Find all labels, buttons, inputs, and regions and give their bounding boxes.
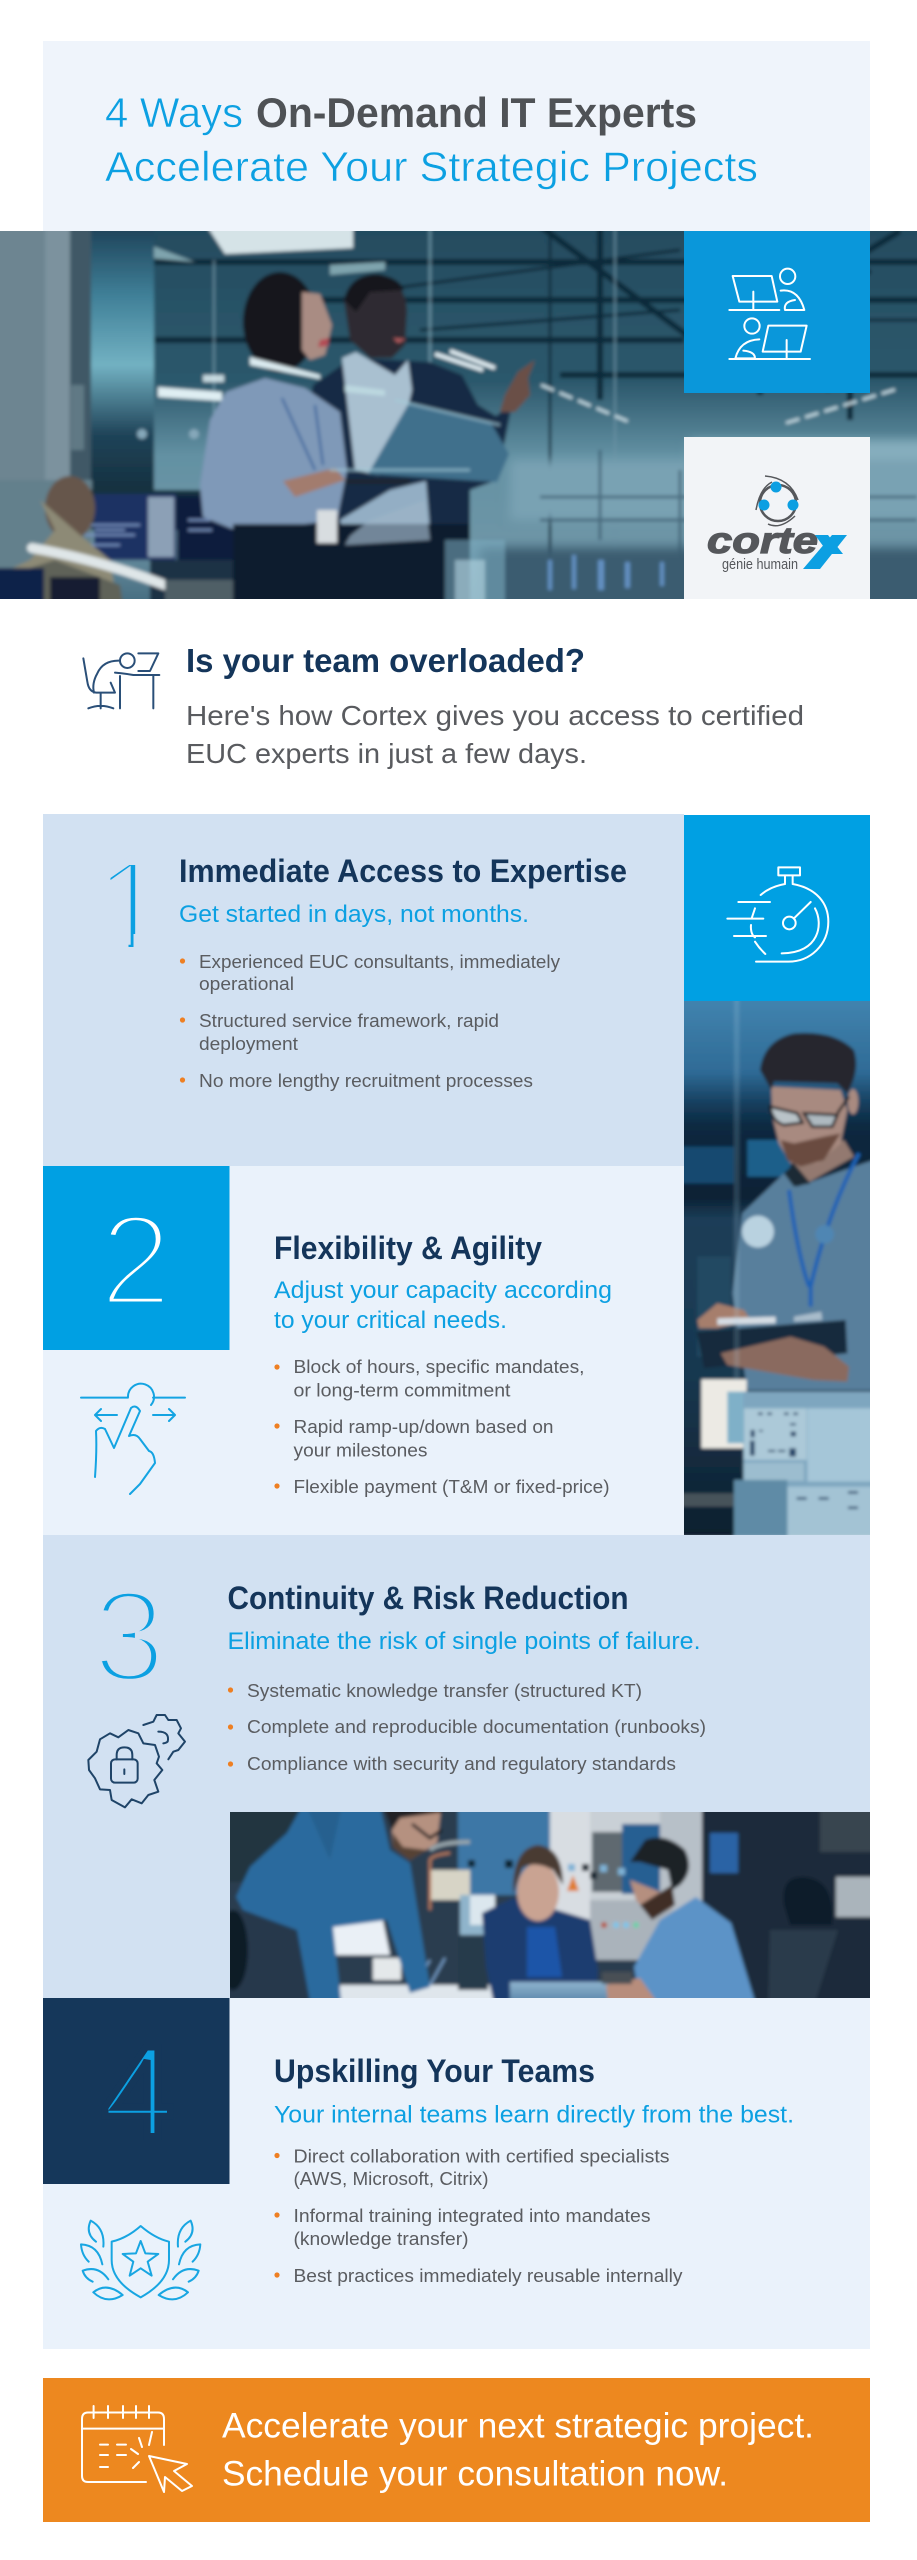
bullet list: Block of hours, specific mandates, (294, 1356, 584, 1377)
white monitor (330, 1917, 393, 1959)
icon: shield with laurels (81, 2221, 200, 2299)
heading: Upskilling Your Teams (274, 2053, 595, 2089)
photo: team around laptop (230, 1812, 870, 1998)
woman (243, 272, 317, 372)
bullet list: Rapid ramp-up/down based on (294, 1416, 554, 1437)
photo: man with tablet (684, 1001, 870, 1535)
panel: header (43, 41, 870, 231)
bullet list (180, 951, 561, 1091)
panel: step 1 (43, 814, 684, 1167)
bullet list: Best practices immediately reusable internally (294, 2265, 683, 2286)
bullet list: deployment (199, 1033, 299, 1054)
icon: two people at computers (729, 269, 810, 359)
bullet list: Flexible payment (T&M or fixed-price) (294, 1476, 610, 1497)
hero photo (0, 211, 917, 619)
panel: intro (83, 642, 804, 769)
icon: stopwatch (727, 867, 828, 962)
heading: Continuity & Risk Reduction (228, 1580, 628, 1616)
bullet list: (knowledge transfer) (294, 2228, 468, 2249)
bullet list: Complete and reproducible documentation (runbooks) (247, 1716, 706, 1737)
logo tagline: génie humain (722, 556, 798, 573)
icon: calendar with cursor (82, 2406, 192, 2492)
desk (336, 1981, 496, 1998)
laptop (506, 1978, 610, 1998)
subheading: Eliminate the risk of single points of failure. (228, 1628, 700, 1655)
bullet list: Direct collaboration with certified specialists (294, 2146, 670, 2166)
bullet list (274, 2146, 683, 2286)
icon: overloaded worker (83, 653, 159, 708)
icon: swipe hand (81, 1384, 185, 1494)
number 3: 3 (93, 1563, 165, 1709)
bullet list: your milestones (294, 1440, 428, 1460)
icon: cortex logo mark (756, 476, 798, 526)
subheading: Your internal teams learn directly from the best. (274, 2102, 794, 2128)
intro text: Here's how Cortex gives you access to certified (186, 700, 804, 731)
call to action text: Accelerate your next strategic project. (222, 2406, 814, 2446)
subheading: Get started in days, not months. (179, 901, 529, 928)
title: 4 Ways (105, 89, 243, 136)
bullet list: or long-term commitment (294, 1380, 511, 1400)
number 2: 2 (100, 1187, 172, 1333)
heading: Immediate Access to Expertise (179, 853, 627, 889)
man body (344, 274, 407, 358)
bullet list (228, 1680, 706, 1774)
streaks (158, 375, 224, 401)
panel: step 2: to your critical needs. (274, 1307, 507, 1334)
bullet list: operational (199, 973, 294, 994)
subheading: Adjust your capacity according (274, 1277, 612, 1304)
title: Accelerate Your Strategic Projects (105, 143, 758, 190)
bullet list: (AWS, Microsoft, Citrix) (294, 2168, 488, 2189)
bullet list: Structured service framework, rapid (199, 1010, 499, 1031)
wall (0, 231, 46, 480)
left man (230, 1913, 246, 1988)
logo wordmark: corte (707, 520, 818, 561)
panel: call to action (43, 2378, 870, 2522)
bullet list: No more lengthy recruitment processes (199, 1070, 533, 1091)
woman (480, 1898, 600, 1998)
panel: call to action: Schedule your consultation now. (222, 2454, 728, 2494)
logo x mark (803, 535, 847, 569)
panel: step 4 (43, 1998, 870, 2349)
number 4: 4 (102, 2018, 174, 2164)
title (105, 89, 758, 190)
bullet list: Compliance with security and regulatory standards (247, 1753, 676, 1774)
bullet list: Systematic knowledge transfer (structured KT) (247, 1680, 642, 1701)
heading: Is your team overloaded? (186, 642, 585, 679)
bullet list (274, 1356, 610, 1497)
bullet list: Informal training integrated into mandates (294, 2205, 650, 2226)
panel: blue icon square (684, 231, 870, 393)
right man (632, 1896, 758, 1998)
monitors (94, 494, 176, 560)
panel: step 2 (43, 1166, 684, 1535)
bullet list: Experienced EUC consultants, immediately (199, 951, 561, 972)
icon: gears with lock (88, 1715, 185, 1807)
seated person (45, 476, 95, 540)
panel: logo square (684, 437, 870, 599)
panel: intro: EUC experts in just a few days. (186, 738, 587, 769)
number 1: 1 (94, 833, 167, 979)
heading: Flexibility & Agility (274, 1230, 542, 1266)
panel: stopwatch square (684, 815, 870, 1001)
title: On-Demand IT Experts (256, 89, 697, 136)
panel: step 3 (43, 1535, 870, 1998)
